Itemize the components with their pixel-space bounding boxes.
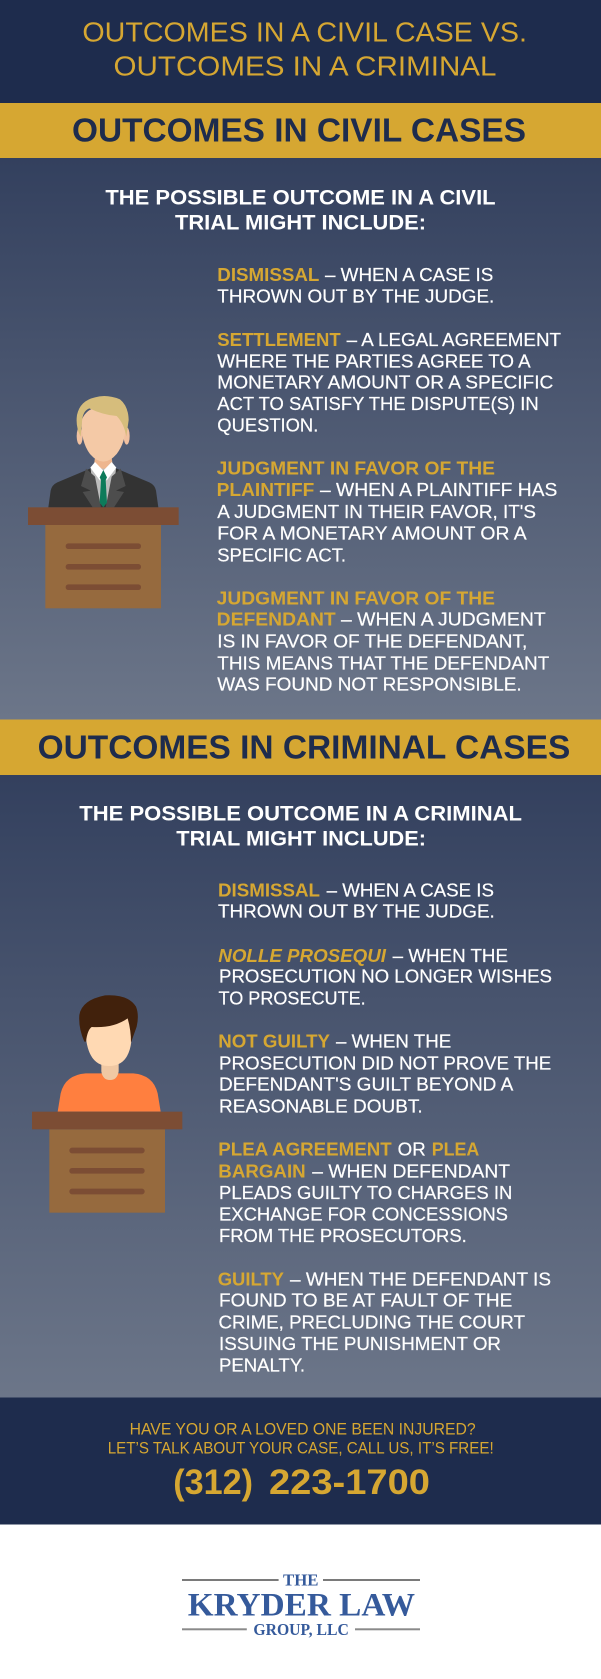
title text: OUTCOMES IN A CIVIL CASE VS. <box>82 17 527 48</box>
civil item: judgment for defendant <box>217 588 549 695</box>
phone number <box>173 1463 430 1502</box>
civil item: judgment for defendant: WAS FOUND NOT RESPONSIBLE. <box>217 674 522 695</box>
logo: The Kryder Law Group <box>182 1571 420 1639</box>
criminal item: dismissal: DISMISSAL <box>218 880 320 901</box>
phone number: (312) <box>173 1463 253 1502</box>
criminal item: not guilty: DEFENDANT'S GUILT BEYOND A <box>219 1074 514 1095</box>
civil item: settlement: – A LEGAL AGREEMENT <box>347 329 561 350</box>
criminal item: not guilty: – WHEN THE <box>336 1030 451 1051</box>
criminal item: plea agreement: FROM THE PROSECUTORS. <box>219 1225 467 1246</box>
criminal item: nolle prosequi: PROSECUTION NO LONGER WISHES <box>219 966 552 987</box>
civil item: settlement <box>217 329 561 436</box>
civil item: judgment for defendant: THIS MEANS THAT THE DEFENDANT <box>217 652 549 673</box>
criminal item: nolle prosequi: NOLLE PROSEQUI <box>218 945 387 966</box>
civil intro text: TRIAL MIGHT INCLUDE: <box>175 212 426 235</box>
civil intro text: THE POSSIBLE OUTCOME IN A CIVIL <box>105 186 496 209</box>
civil item: settlement: SETTLEMENT <box>217 329 341 350</box>
criminal item: not guilty: REASONABLE DOUBT. <box>219 1095 423 1116</box>
criminal item: not guilty: NOT GUILTY <box>218 1030 331 1051</box>
panel: criminal cases <box>0 720 601 1398</box>
panel: civil cases <box>0 103 601 720</box>
criminal item: not guilty: PROSECUTION DID NOT PROVE THE <box>219 1052 551 1073</box>
civil item: judgment for defendant: DEFENDANT <box>217 609 336 630</box>
icon: lawyer at podium <box>28 396 179 608</box>
criminal item: dismissal: – WHEN A CASE IS <box>327 880 494 901</box>
call to action text <box>108 1419 494 1457</box>
civil item: judgment for plaintiff <box>217 458 557 565</box>
criminal item: guilty: ISSUING THE PUNISHMENT OR <box>219 1333 501 1354</box>
civil item: judgment for plaintiff: A JUDGMENT IN THEIR FAVOR, IT'S <box>217 501 536 522</box>
civil item: judgment for defendant: – WHEN A JUDGMENT <box>341 609 546 630</box>
civil item: judgment for plaintiff: PLAINTIFF <box>217 479 314 500</box>
title banner <box>0 0 601 103</box>
civil item: settlement: ACT TO SATISFY THE DISPUTE(S) IN <box>217 393 539 414</box>
call to action footer <box>0 1398 601 1524</box>
heading band: criminal <box>0 720 601 775</box>
criminal item: not guilty <box>218 1030 551 1116</box>
civil item: dismissal: DISMISSAL <box>217 264 319 285</box>
civil item: judgment for defendant: IS IN FAVOR OF THE DEFENDANT, <box>217 631 527 652</box>
civil item: dismissal: – WHEN A CASE IS <box>325 264 493 285</box>
civil item: judgment for plaintiff: JUDGMENT IN FAVOR OF THE <box>217 458 495 479</box>
criminal intro text <box>79 803 522 851</box>
criminal item: nolle prosequi: TO PROSECUTE. <box>218 988 366 1009</box>
criminal item: plea agreement <box>218 1139 512 1246</box>
title text <box>82 17 527 82</box>
criminal item: plea agreement: OR <box>398 1139 426 1160</box>
civil item: settlement: WHERE THE PARTIES AGREE TO A <box>217 350 531 371</box>
civil intro text <box>105 186 496 235</box>
civil item: dismissal <box>217 264 494 306</box>
criminal intro text: TRIAL MIGHT INCLUDE: <box>176 828 426 851</box>
logo: The Kryder Law Group: KRYDER LAW <box>188 1588 415 1624</box>
civil item: judgment for defendant: JUDGMENT IN FAVOR OF THE <box>217 588 495 609</box>
civil item: judgment for plaintiff: – WHEN A PLAINTIFF HAS <box>320 479 557 500</box>
heading band: civil: OUTCOMES IN CIVIL CASES <box>72 112 526 149</box>
criminal item: plea agreement: EXCHANGE FOR CONCESSIONS <box>219 1204 508 1225</box>
phone number: 223-1700 <box>269 1463 430 1502</box>
call to action text: HAVE YOU OR A LOVED ONE BEEN INJURED? <box>130 1419 476 1438</box>
criminal item: dismissal: THROWN OUT BY THE JUDGE. <box>218 901 495 922</box>
criminal item: nolle prosequi: – WHEN THE <box>393 945 508 966</box>
criminal item: plea agreement: PLEA AGREEMENT <box>218 1139 392 1160</box>
civil item: dismissal: THROWN OUT BY THE JUDGE. <box>217 285 494 306</box>
logo: The Kryder Law Group: THE <box>283 1571 318 1590</box>
heading band: criminal: OUTCOMES IN CRIMINAL CASES <box>38 729 570 766</box>
civil item: judgment for plaintiff: FOR A MONETARY AMOUNT OR A <box>217 523 527 544</box>
criminal item: guilty: PENALTY. <box>219 1355 305 1376</box>
criminal item: guilty: FOUND TO BE AT FAULT OF THE <box>219 1290 512 1311</box>
criminal item: plea agreement: – WHEN DEFENDANT <box>312 1161 510 1182</box>
civil item: judgment for plaintiff: SPECIFIC ACT. <box>217 544 346 565</box>
criminal item: plea agreement: PLEA <box>432 1139 479 1160</box>
criminal item: guilty: GUILTY <box>218 1268 285 1289</box>
criminal item: plea agreement: PLEADS GUILTY TO CHARGES IN <box>219 1182 512 1203</box>
criminal item: plea agreement: BARGAIN <box>218 1161 306 1182</box>
call to action text: LET’S TALK ABOUT YOUR CASE, CALL US, IT’S FREE! <box>108 1438 494 1457</box>
criminal item: guilty <box>218 1268 551 1376</box>
logo: The Kryder Law Group: GROUP, LLC <box>253 1620 349 1639</box>
criminal item: dismissal <box>218 880 495 922</box>
criminal intro text: THE POSSIBLE OUTCOME IN A CRIMINAL <box>79 803 522 826</box>
icon: defendant at podium <box>32 995 182 1213</box>
title text: OUTCOMES IN A CRIMINAL <box>114 51 496 82</box>
criminal item: nolle prosequi <box>218 945 552 1009</box>
criminal item: guilty: CRIME, PRECLUDING THE COURT <box>218 1312 525 1333</box>
heading band: civil <box>0 103 601 158</box>
civil item: settlement: MONETARY AMOUNT OR A SPECIFIC <box>217 372 553 393</box>
criminal item: guilty: – WHEN THE DEFENDANT IS <box>290 1268 551 1289</box>
civil item: settlement: QUESTION. <box>217 415 318 436</box>
